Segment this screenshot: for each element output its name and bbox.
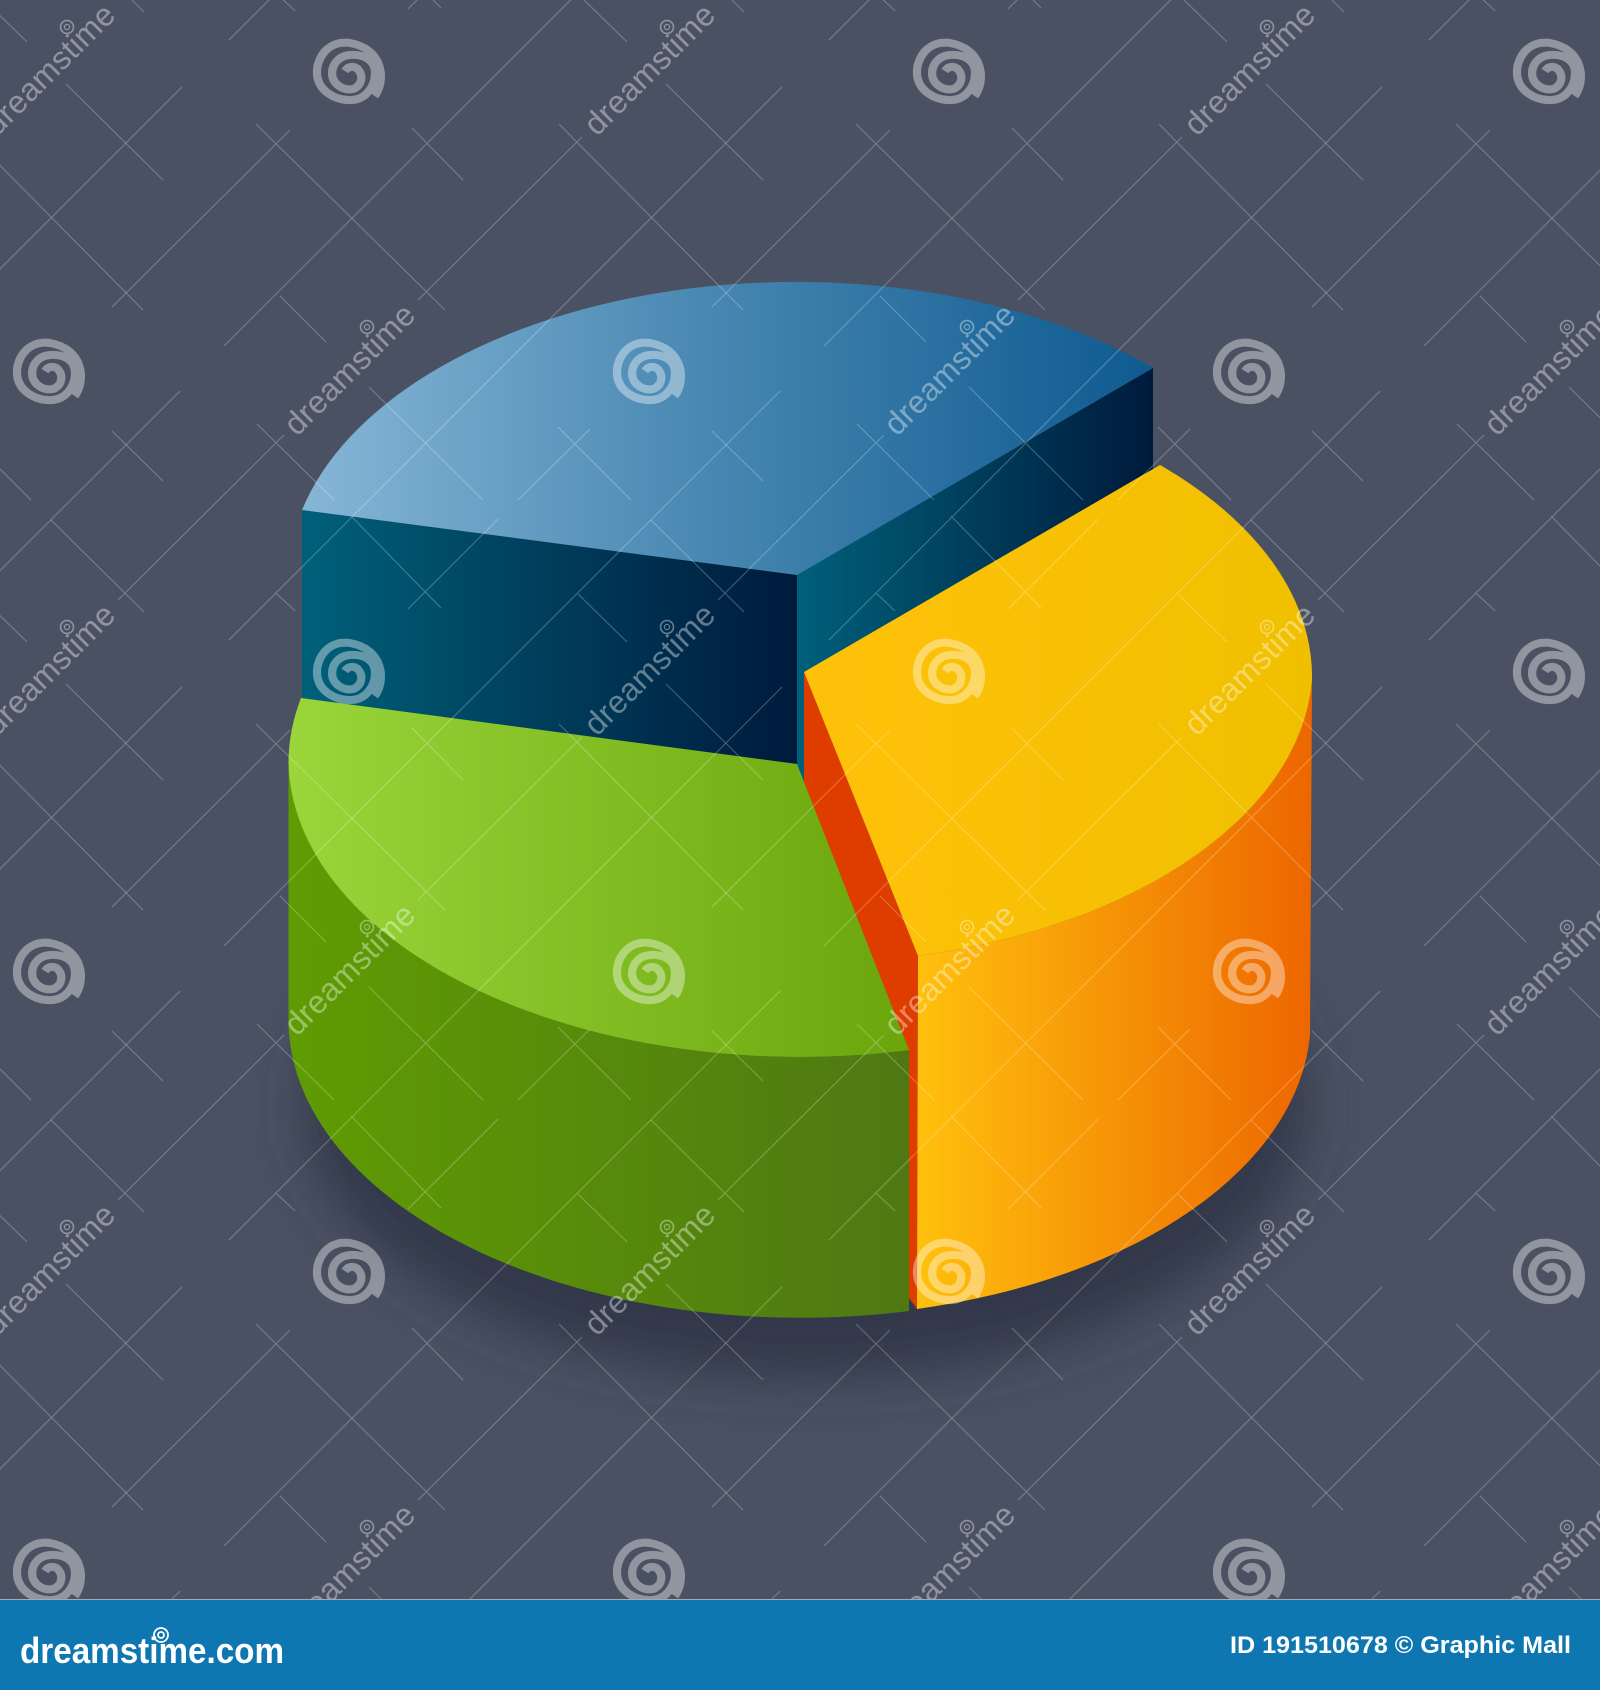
watermark text: dreamstime (276, 296, 422, 442)
watermark text: dreamstime (876, 296, 1022, 442)
watermark text: dreamstime (876, 896, 1022, 1042)
watermark text: dreamstime (1176, 0, 1322, 142)
watermark text: dreamstime (576, 1196, 722, 1342)
watermark text: dreamstime (276, 1496, 422, 1642)
watermark text: dreamstime (876, 1496, 1022, 1642)
watermark text: dreamstime (576, 0, 722, 142)
watermark text: dreamstime (1176, 596, 1322, 742)
watermark text: dreamstime (276, 896, 422, 1042)
footer banner (0, 1599, 1600, 1690)
3D pie chart (288, 282, 1312, 1318)
slice: orange and yellow (804, 465, 1312, 1309)
drop shadow under chart (306, 833, 1306, 1377)
slice: green (288, 698, 910, 1318)
watermark text: dreamstime (576, 596, 722, 742)
logo text: dreamstime.com (20, 1630, 284, 1671)
image credit: ID 191510678 © Graphic Mall (1230, 1632, 1571, 1659)
logo mark (154, 1628, 168, 1642)
watermark text: dreamstime (1176, 1196, 1322, 1342)
slice: blue (302, 282, 1153, 790)
